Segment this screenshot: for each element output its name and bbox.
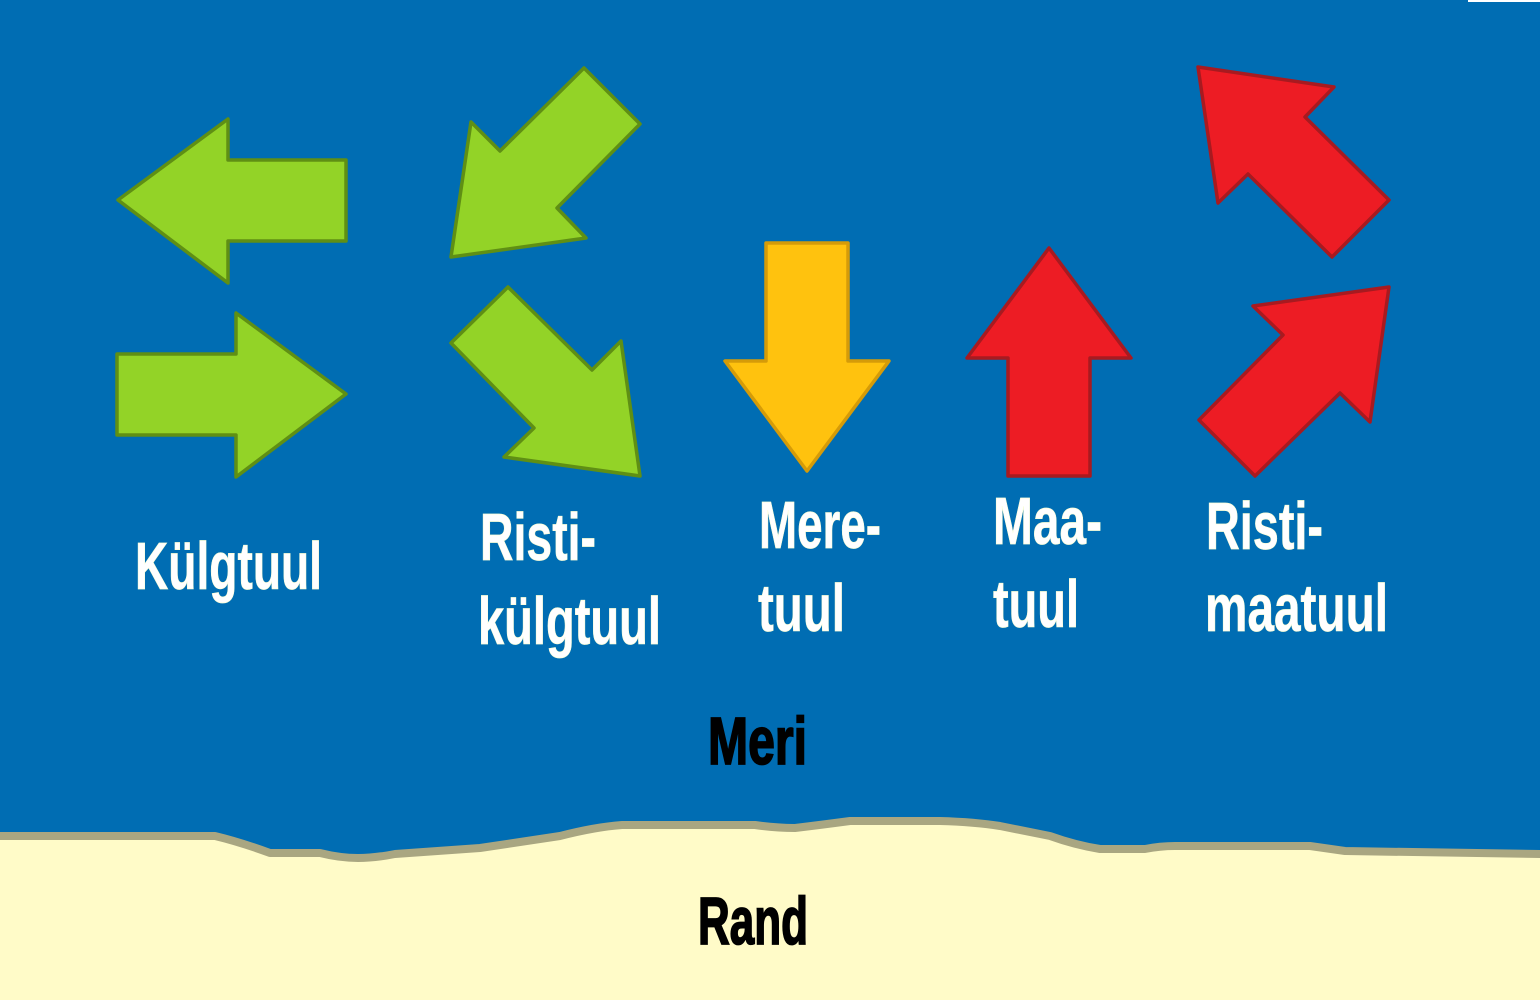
label: Risti-maatuul: Risti- [1206,489,1323,564]
label: Risti-maatuul [1205,489,1388,646]
label: Risti-külgtuul [478,500,661,659]
arrow: side wind left [118,119,346,283]
arrow: land wind up [967,248,1131,476]
label: Risti-külgtuul: Risti- [480,500,596,575]
label: Maa-tuul: Maa- [993,484,1102,559]
arrow: cross land wind up-left [1198,67,1389,257]
arrow: side wind right [117,313,346,477]
label: Külgtuul: Külgtuul [135,529,322,604]
label: Mere-tuul: tuul [758,571,845,646]
label: Risti-külgtuul: külgtuul [478,584,661,659]
label: Meri: Meri [708,704,807,779]
top right white strip [1468,0,1540,2]
label: Maa-tuul: tuul [993,567,1079,642]
label: Mere-tuul [758,488,881,646]
arrow: cross side wind down-right [451,287,640,476]
label: Mere-tuul: Mere- [759,488,881,563]
arrow: sea wind down [725,243,889,471]
arrow: cross land wind up-right [1199,287,1389,476]
beach with shoreline [0,821,1540,1000]
label: Maa-tuul [993,484,1102,642]
label: Risti-maatuul: maatuul [1205,571,1388,646]
arrow: cross side wind down-left [451,68,640,257]
label: Rand: Rand [698,884,808,959]
